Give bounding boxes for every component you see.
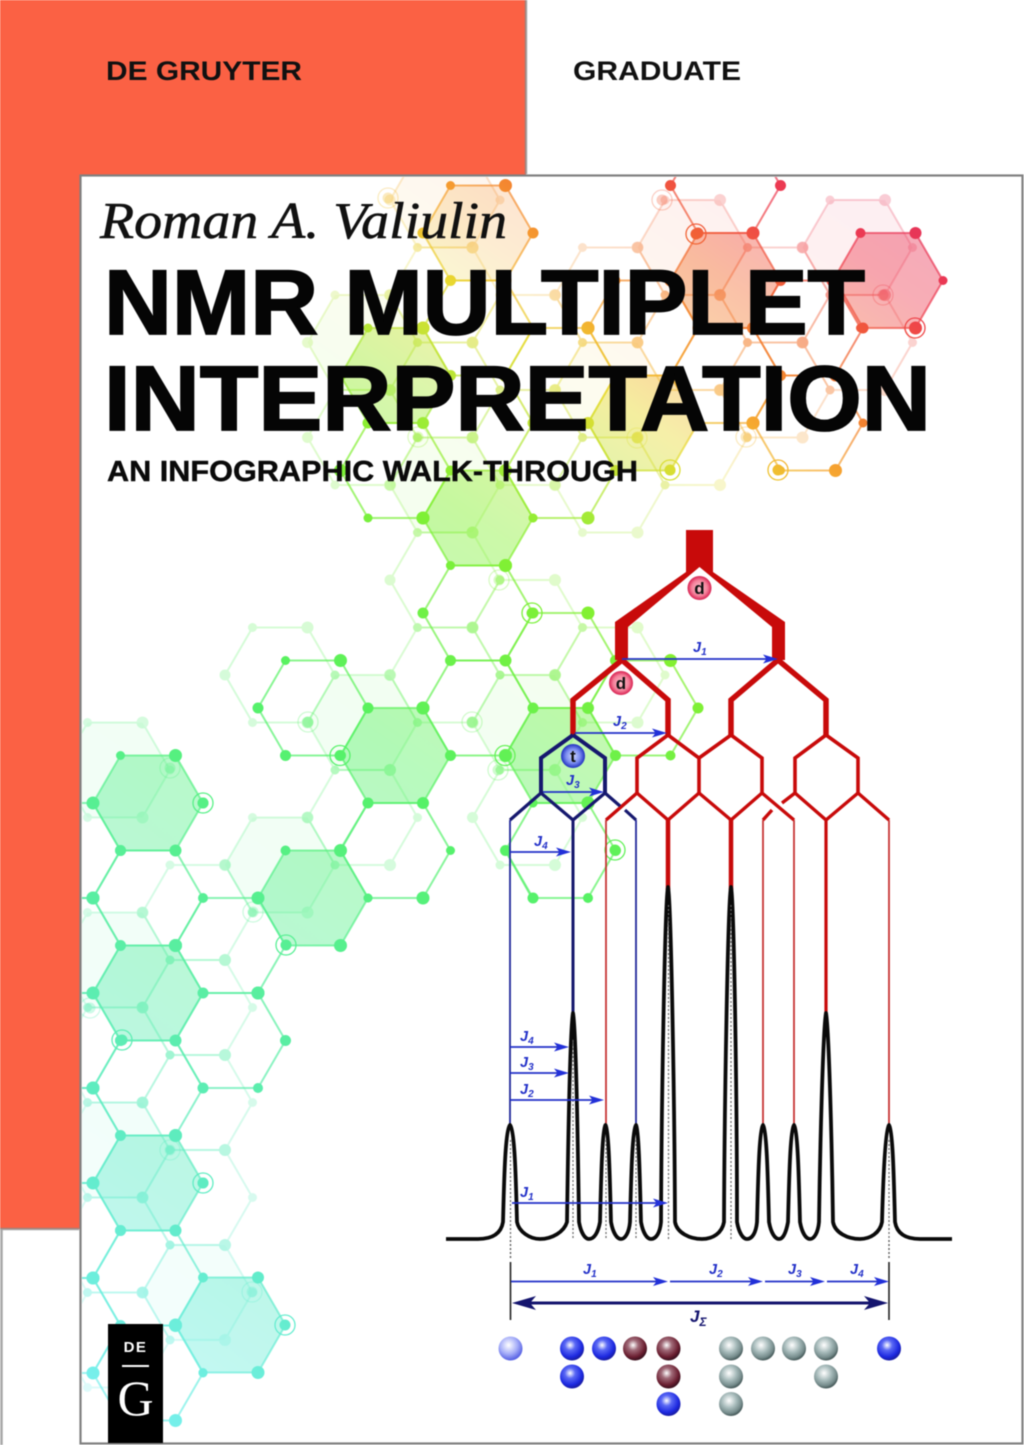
red tree: thin stems <box>606 820 889 1126</box>
arrow J2 mid <box>510 1082 604 1104</box>
splitting tree diagram <box>510 530 889 1126</box>
red tree: second doublet <box>573 660 826 735</box>
arrow J4 top: J <box>534 834 542 850</box>
scale arrow J4: J <box>850 1262 858 1278</box>
arrow J2 mid: J <box>520 1082 528 1098</box>
scale end ticks <box>510 1262 889 1320</box>
scale arrow J3 <box>765 1262 825 1286</box>
bottom measurement scale <box>510 1240 889 1329</box>
peak centre dotted guides <box>510 905 889 1258</box>
arrow J2 top <box>575 714 667 738</box>
total coupling double arrow: J <box>690 1307 699 1326</box>
scale arrow J2 <box>670 1262 763 1286</box>
scale arrow J4: 4 <box>857 1269 864 1280</box>
arrow J3 top <box>543 773 604 796</box>
arrow J1 lower: 1 <box>528 1192 534 1203</box>
arrow J4 top <box>510 834 571 856</box>
arrow J2 top: 2 <box>620 721 627 732</box>
arrow J3 mid <box>510 1055 569 1078</box>
scale arrow J2: 2 <box>716 1269 723 1280</box>
arrow J4 mid: J <box>520 1029 528 1045</box>
badge: doublet top: d <box>694 579 705 598</box>
arrow J1 top: 1 <box>701 647 707 658</box>
author name: Roman A. Valiulin <box>99 193 507 250</box>
scale arrow J1 <box>511 1262 668 1286</box>
scale arrow J3: J <box>788 1262 796 1278</box>
red tree: stems to peaks <box>668 820 731 890</box>
blue tree: lower branches <box>510 793 636 820</box>
blue tree: triplet <box>541 735 605 793</box>
publisher logo: DE <box>124 1339 147 1356</box>
scale arrow J3: 3 <box>796 1269 802 1280</box>
arrow J1 lower <box>512 1185 668 1208</box>
scale arrow J1: 1 <box>591 1269 597 1280</box>
arrow J4 mid: 4 <box>527 1036 534 1047</box>
subtitle: AN INFOGRAPHIC WALK-THROUGH <box>107 456 638 488</box>
arrow J2 mid: 2 <box>527 1089 534 1100</box>
multiplicity spheres <box>498 1336 901 1416</box>
red tree: singlet stem, first doublet and stems <box>615 530 785 660</box>
badge: triplet <box>561 744 585 768</box>
badge: doublet second <box>609 671 633 695</box>
arrow J3 mid: J <box>520 1055 528 1071</box>
arrow J1 top <box>622 640 778 664</box>
red tree: triplet level <box>637 735 858 793</box>
arrow J2 top: J <box>613 714 621 730</box>
scale arrow J2: J <box>709 1262 717 1278</box>
publisher logo: G <box>117 1370 154 1426</box>
title line two: INTERPRETATION <box>104 348 931 450</box>
arrow J3 top: 3 <box>574 780 580 791</box>
arrow J3 mid: 3 <box>528 1062 534 1073</box>
badge: doublet top <box>688 576 712 600</box>
title line one: NMR MULTIPLET <box>104 252 865 354</box>
arrow J4 top: 4 <box>541 841 548 852</box>
blue tree: centre stem <box>572 820 574 1015</box>
panel: back cover edge shadow <box>0 0 526 1445</box>
badge: triplet: t <box>570 747 576 766</box>
arrow J1 top: J <box>693 640 701 656</box>
scale arrow J1: J <box>583 1262 591 1278</box>
blue tree: stems <box>510 820 636 1126</box>
red tree: lower branches <box>606 793 889 820</box>
coupling arrows in tree <box>510 640 778 1208</box>
total coupling double arrow <box>512 1296 888 1329</box>
arrow J3 top: J <box>566 773 574 789</box>
dotted lines to ticks <box>510 1240 889 1259</box>
arrow J4 mid <box>510 1029 569 1052</box>
spectrum peaks <box>446 887 952 1239</box>
scale arrow J4 <box>827 1262 889 1286</box>
publisher logo <box>108 1324 163 1443</box>
total coupling double arrow: Σ <box>698 1315 707 1329</box>
panel: orange back cover block <box>0 0 526 1229</box>
badge: doublet second: d <box>616 674 626 693</box>
red tree: outer stems <box>824 820 828 1015</box>
publisher heading: DE GRUYTER <box>106 56 302 86</box>
series heading: GRADUATE <box>573 56 741 86</box>
arrow J1 lower: J <box>520 1185 528 1201</box>
